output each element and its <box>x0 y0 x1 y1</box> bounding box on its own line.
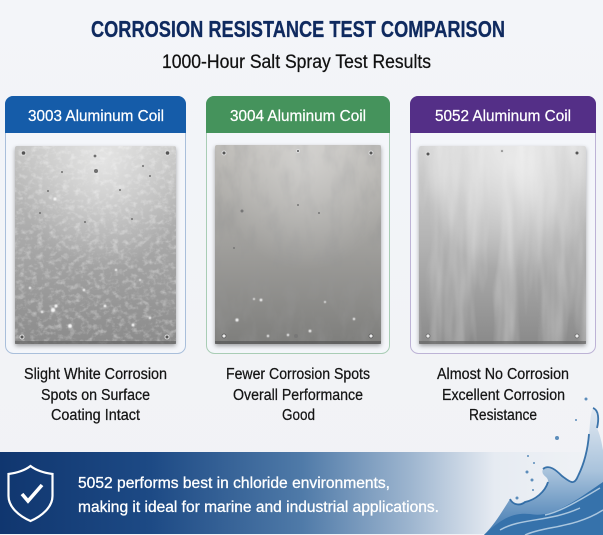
card header: 3004 <box>206 96 390 133</box>
text: 3003 result: Coating Intact <box>51 407 141 424</box>
card header: 3004: 3004 Aluminum Coil <box>230 108 366 125</box>
icon: shield with check <box>8 466 52 521</box>
plate: 3004 sample <box>215 145 381 344</box>
text: 3003 result <box>24 366 167 424</box>
text: 3004 result <box>226 366 370 424</box>
text: 5052 result: Almost No Corrosion <box>437 366 569 383</box>
text: 3004 result: Fewer Corrosion Spots <box>226 366 370 383</box>
title: CORROSION RESISTANCE TEST COMPARISON <box>91 16 505 42</box>
subtitle: 1000-Hour Salt Spray Test Results <box>162 52 431 73</box>
text: 3004 result: Overall Performance <box>233 387 363 404</box>
panel: 3003 aluminum coil <box>5 96 186 354</box>
banner text <box>78 475 439 516</box>
icon: water splash <box>484 398 603 535</box>
banner text: 5052 performs best in chloride environments, <box>78 475 390 492</box>
banner text: making it ideal for marine and industrial applications. <box>78 499 439 516</box>
text: 3003 result: Slight White Corrosion <box>24 366 167 383</box>
panel: 3004 aluminum coil <box>206 96 390 354</box>
card header: 5052 <box>410 96 596 133</box>
text: 3003 result: Spots on Surface <box>41 387 150 404</box>
plate: 5052 sample <box>419 146 586 344</box>
text: 5052 result: Excellent Corrosion <box>442 387 565 404</box>
plate: 3003 sample <box>15 146 176 344</box>
text: 3004 result: Good <box>282 407 315 424</box>
panel: 5052 aluminum coil <box>410 96 596 354</box>
card header: 3003: 3003 Aluminum Coil <box>28 108 164 125</box>
banner <box>0 452 603 534</box>
card header: 3003 <box>5 96 186 133</box>
card header: 5052: 5052 Aluminum Coil <box>435 108 571 125</box>
text: 5052 result: Resistance <box>469 407 537 424</box>
text: 5052 result <box>437 366 569 424</box>
